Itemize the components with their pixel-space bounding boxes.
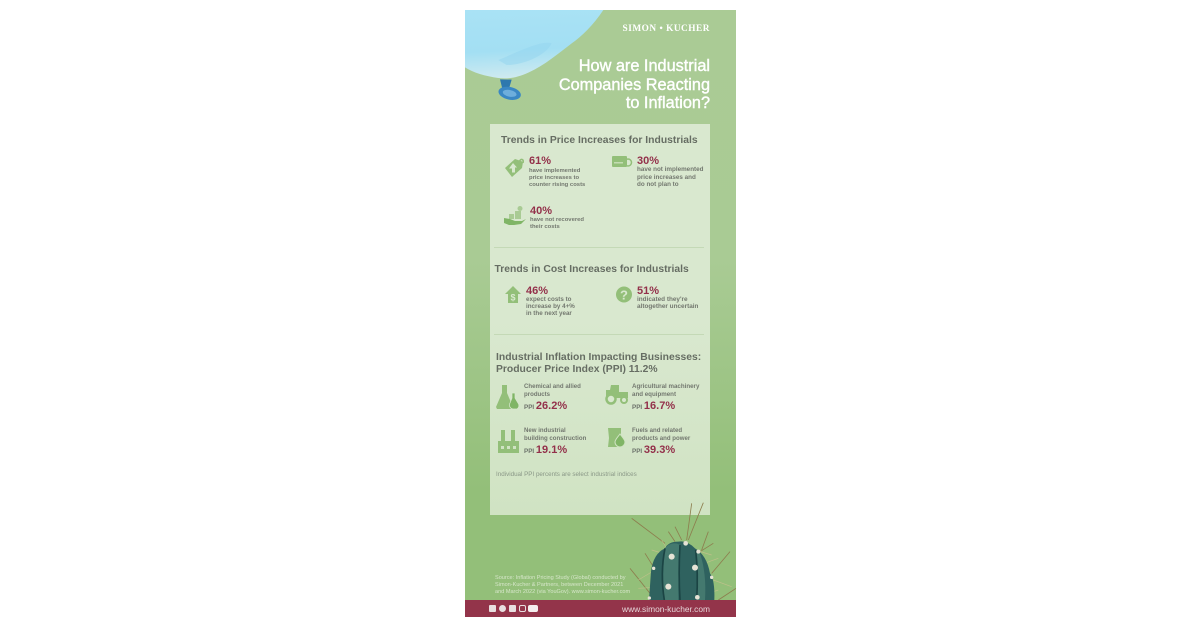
title: Companies Reacting xyxy=(559,76,710,94)
text chemical: Chemical and allied xyxy=(524,383,581,390)
text 51%: indicated they're xyxy=(637,296,688,303)
text 40%: have not recovered xyxy=(530,217,584,223)
text 40%: 40% xyxy=(530,205,552,217)
title: to Inflation? xyxy=(626,94,710,112)
cactus xyxy=(630,502,736,600)
item: chemical xyxy=(496,383,581,412)
icon: twitter xyxy=(509,605,516,612)
text 61%: have implemented xyxy=(529,168,580,174)
balloon xyxy=(465,10,604,100)
text 30% xyxy=(637,155,704,188)
text 61%: 61% xyxy=(529,155,551,167)
logo: SIMON • KUCHER xyxy=(622,24,710,34)
text 61% xyxy=(529,155,585,188)
text fuels: Fuels and related xyxy=(632,427,682,434)
icon: factory xyxy=(498,430,519,453)
text chemical: products xyxy=(524,391,550,398)
source: Source: Inflation Pricing Study (Global) conducted by xyxy=(495,574,625,580)
source: Simon-Kucher & Partners, between December 2021 xyxy=(495,582,623,588)
text chemical xyxy=(524,383,581,412)
text 30%: 30% xyxy=(637,155,659,167)
icon: price tag xyxy=(505,158,524,177)
infographic background xyxy=(465,10,736,617)
footer bar xyxy=(465,600,736,617)
note: Individual PPI percents are select industrial indices xyxy=(496,471,637,478)
text 30%: do not plan to xyxy=(637,181,679,188)
text building: New industrial xyxy=(524,427,566,434)
item: building xyxy=(498,427,586,456)
text 30%: have not implemented xyxy=(637,166,703,173)
text 51%: altogether uncertain xyxy=(637,303,698,310)
text 46%: 46% xyxy=(526,285,548,297)
stat: 46% xyxy=(505,285,575,317)
text 46%: in the next year xyxy=(526,310,572,317)
heading: ppi: Producer Price Index (PPI) 11.2% xyxy=(496,364,658,375)
text 46%: increase by 4+% xyxy=(526,303,575,310)
text 30%: price increases and xyxy=(637,174,696,180)
icon: barrel and drop xyxy=(608,428,624,447)
text fuels xyxy=(632,427,690,456)
text building xyxy=(524,427,586,456)
item: agri xyxy=(605,383,700,412)
title xyxy=(559,57,710,112)
stat: 51% xyxy=(616,285,698,310)
icon: tractor xyxy=(605,385,628,405)
text building: PPI 19.1% xyxy=(524,444,567,456)
title: How are Industrial xyxy=(579,57,710,75)
icon: flasks xyxy=(496,385,518,409)
icon: dollar arrow up: $ xyxy=(510,292,516,302)
heading: price increases: Trends in Price Increases for Industrials xyxy=(501,134,698,146)
icon: hand with blocks xyxy=(504,206,526,225)
icon: dollar arrow up xyxy=(505,286,521,303)
text agri: Agricultural machinery xyxy=(632,383,699,390)
icon: instagram xyxy=(519,605,526,612)
text 61%: price increases to xyxy=(529,175,579,181)
text 61%: counter rising costs xyxy=(529,182,585,188)
text 46% xyxy=(526,285,575,317)
stat: 40% xyxy=(504,205,584,230)
text 51% xyxy=(637,285,698,310)
item: fuels xyxy=(608,427,690,456)
text 51%: 51% xyxy=(637,285,659,297)
text fuels: PPI 39.3% xyxy=(632,444,675,456)
stat: 61% xyxy=(505,155,585,188)
heading: ppi xyxy=(496,352,701,375)
text chemical: PPI 26.2% xyxy=(524,400,567,412)
icon: card tag xyxy=(612,156,632,167)
icon: question mark xyxy=(616,286,632,302)
text agri: and equipment xyxy=(632,391,676,398)
website: www.simon-kucher.com xyxy=(622,604,710,614)
icon: linkedin xyxy=(489,605,496,612)
text fuels: products and power xyxy=(632,435,690,442)
text building: building construction xyxy=(524,435,586,442)
icon: facebook xyxy=(499,605,506,612)
stat: 30% xyxy=(612,155,704,188)
heading: cost increases: Trends in Cost Increases for Industrials xyxy=(494,264,689,274)
panel xyxy=(490,124,710,515)
source: and March 2022 (via YouGov). www.simon-kucher.com xyxy=(495,589,630,595)
text 40% xyxy=(530,205,584,230)
source xyxy=(495,574,630,595)
icon: question mark: ? xyxy=(620,288,628,302)
text agri xyxy=(632,383,700,412)
social icons xyxy=(489,605,538,612)
heading: ppi: Industrial Inflation Impacting Businesses: xyxy=(496,352,701,362)
text agri: PPI 16.7% xyxy=(632,400,675,412)
text 40%: their costs xyxy=(530,224,560,230)
text 46%: expect costs to xyxy=(526,296,572,303)
icon: youtube xyxy=(528,605,538,612)
